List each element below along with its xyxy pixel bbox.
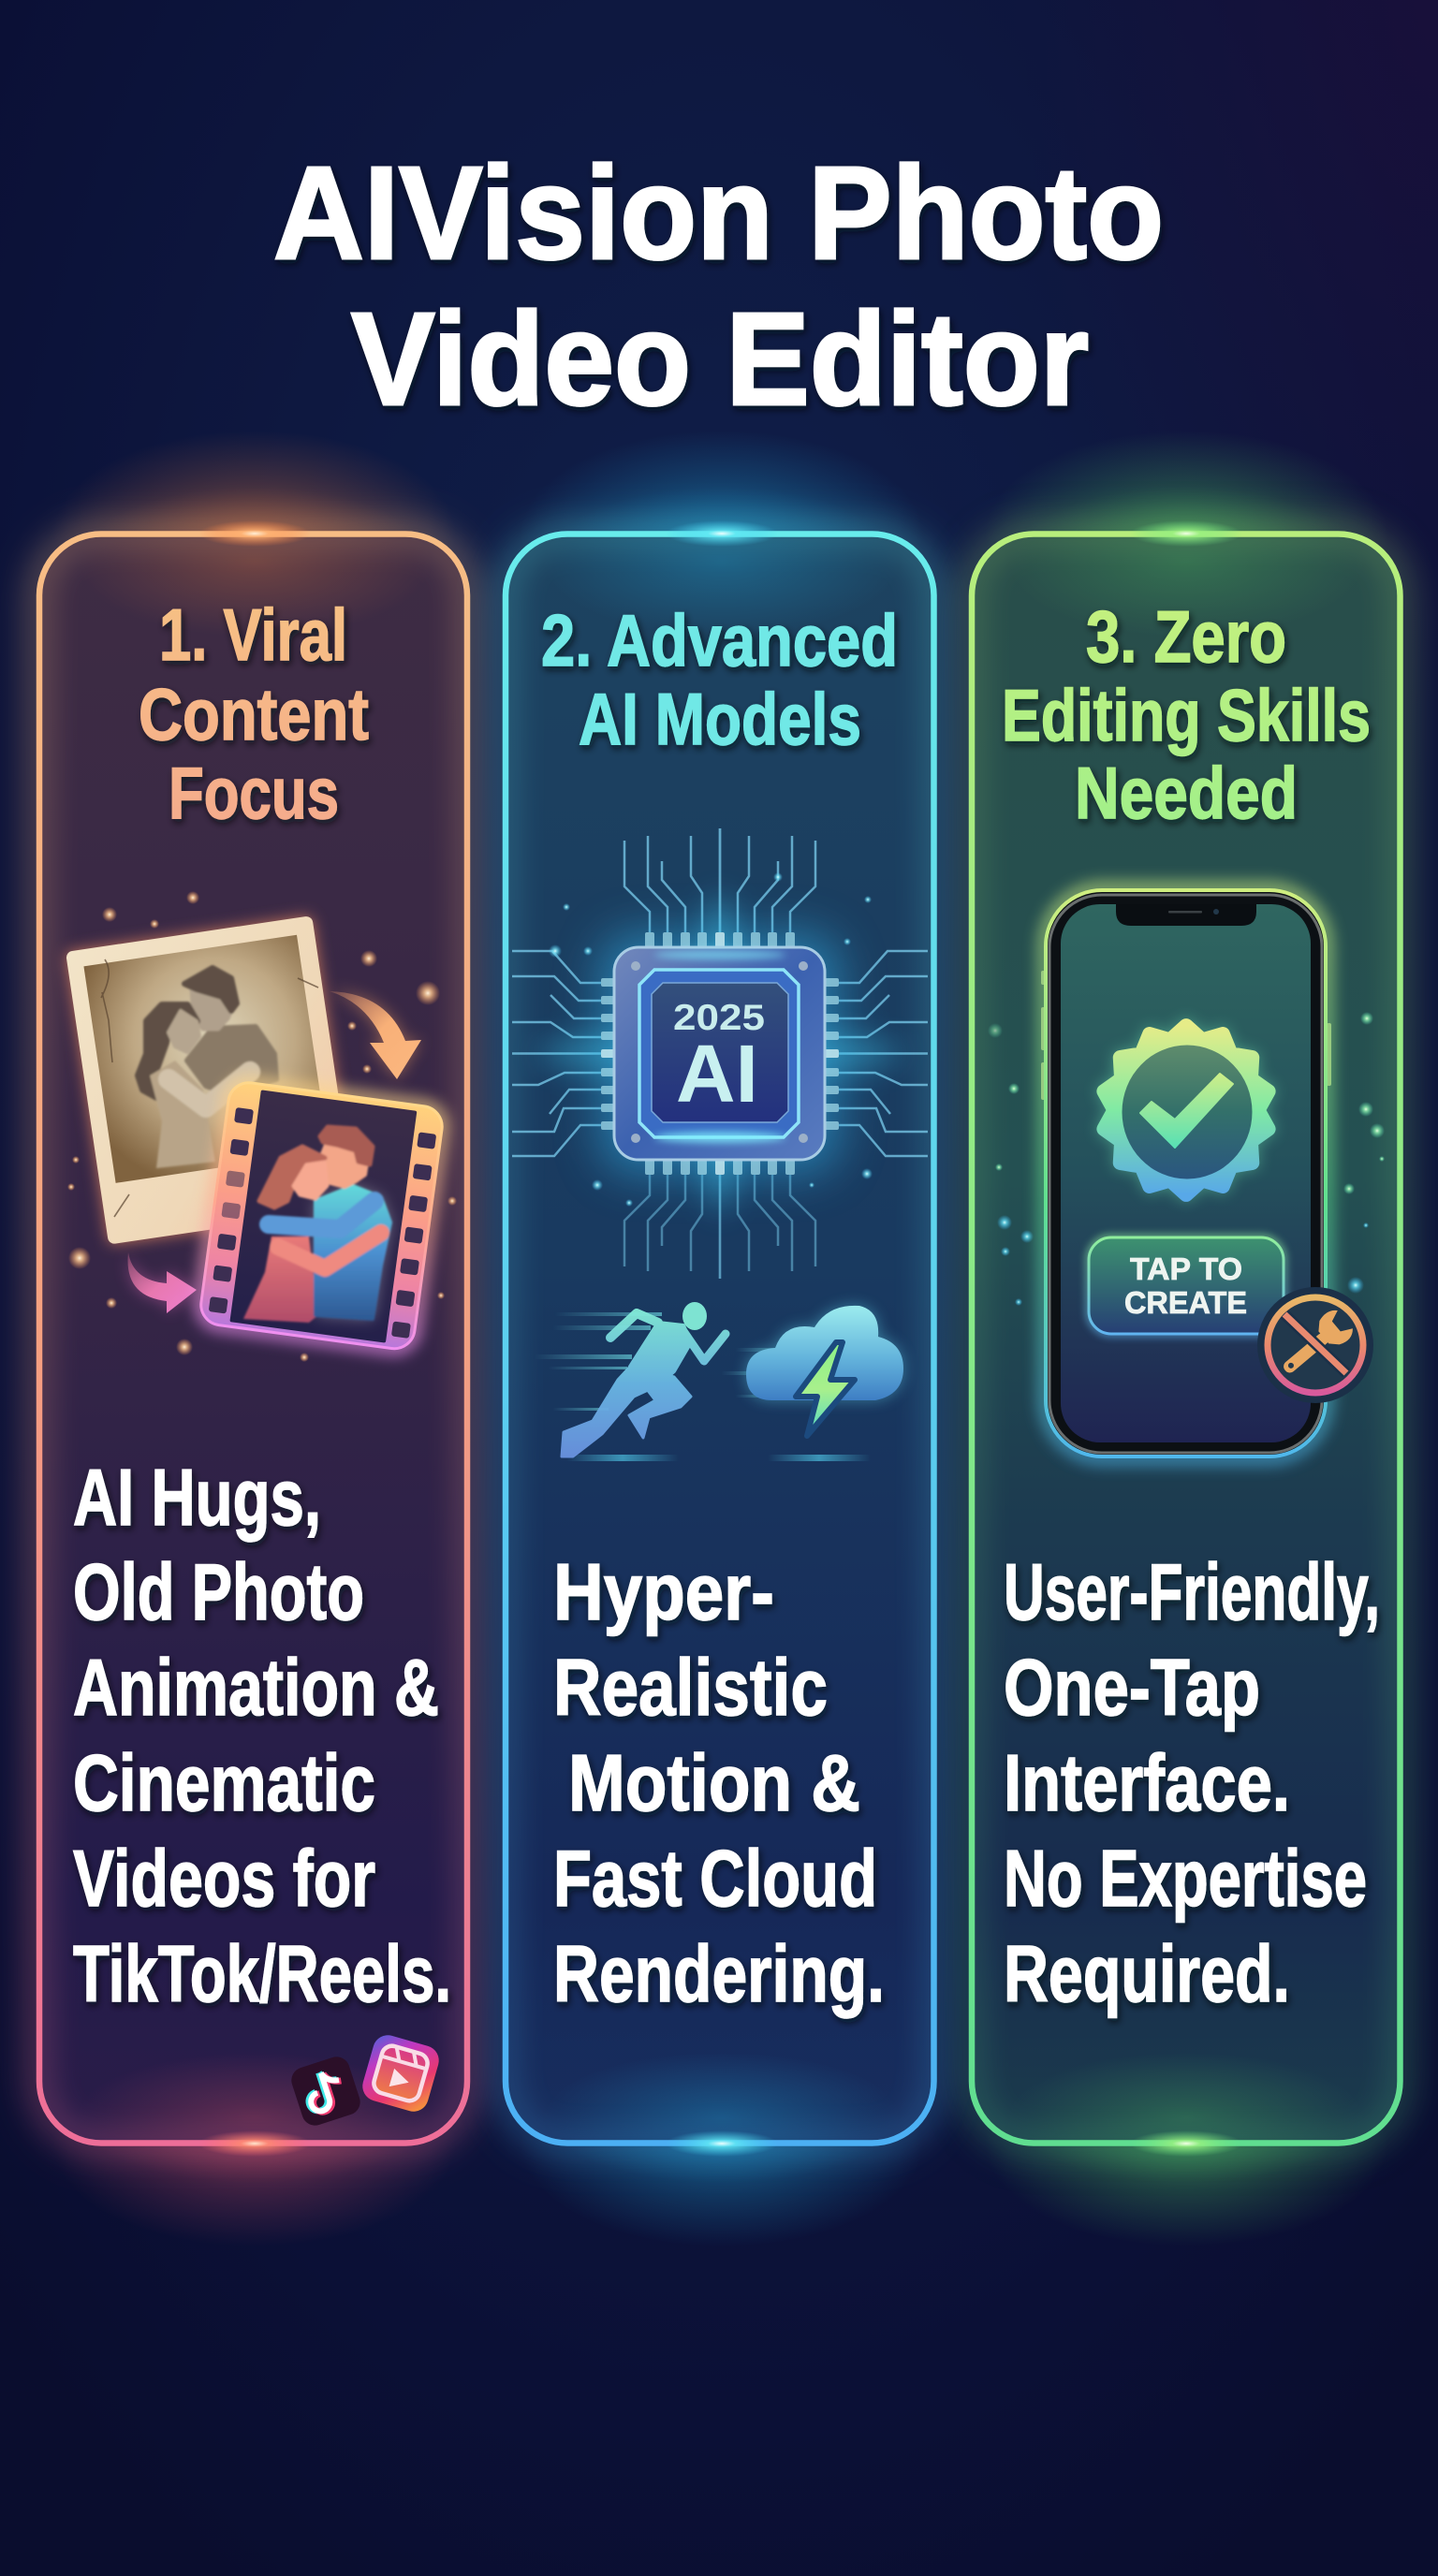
- body text: Motion &: [568, 1739, 860, 1828]
- button: tap to create: CREATE: [1124, 1285, 1247, 1320]
- icon: AI chip 2025: AI: [676, 1029, 758, 1120]
- icon: speed lines: [534, 1312, 871, 1461]
- icon: running figure: [562, 1302, 726, 1456]
- body text: Cinematic: [73, 1739, 375, 1828]
- body text: Animation &: [73, 1644, 439, 1733]
- heading: 2. Advanced AI Models: 2. Advanced: [541, 599, 898, 681]
- glowing film frame with embracing couple: [198, 1080, 445, 1351]
- old sepia photo: [66, 915, 355, 1245]
- body text: Hyper-: [553, 1548, 774, 1637]
- heading: 3. Zero Editing Skills Needed: Needed: [1075, 752, 1298, 834]
- body text: [553, 1548, 885, 2019]
- body text: AI Hugs,: [73, 1454, 321, 1543]
- button: tap to create: TAP TO: [1130, 1251, 1242, 1286]
- body text: TikTok/Reels.: [73, 1930, 451, 2019]
- body text: Realistic: [553, 1644, 828, 1733]
- arrow: old photo to film (orange): [330, 991, 421, 1079]
- arrow: pink curved: [128, 1252, 197, 1313]
- icon: cloud with lightning bolt: [746, 1306, 903, 1436]
- icon: smartphone: [1041, 888, 1373, 1458]
- body text: Old Photo: [73, 1548, 364, 1637]
- icon: AI chip circuit traces: [512, 828, 928, 1279]
- sparkles: [67, 891, 457, 1362]
- body text: Rendering.: [553, 1930, 885, 2019]
- heading: 1. Viral Content Focus: Content: [139, 673, 369, 755]
- sparkles: [988, 1012, 1385, 1306]
- panel: 1. Viral Content Focus: [39, 431, 467, 2247]
- title: AIVision Photo: [273, 139, 1164, 286]
- panel: 3. Zero Editing Skills Needed: [972, 431, 1401, 2247]
- body text: One-Tap: [1004, 1644, 1260, 1733]
- title: Video Editor: [351, 285, 1089, 432]
- heading: 3. Zero Editing Skills Needed: [1002, 595, 1371, 834]
- body text: [73, 1454, 451, 2019]
- body text: Interface.: [1004, 1739, 1290, 1828]
- heading: 2. Advanced AI Models: AI Models: [579, 678, 861, 760]
- sparkles: [549, 872, 873, 1207]
- heading: 1. Viral Content Focus: 1. Viral: [159, 593, 347, 676]
- heading: 1. Viral Content Focus: [139, 593, 369, 834]
- icon: Instagram Reels: [359, 2031, 443, 2115]
- title: [273, 139, 1164, 432]
- body text: Required.: [1004, 1930, 1290, 2019]
- heading: 1. Viral Content Focus: Focus: [169, 752, 339, 834]
- body text: Fast Cloud: [553, 1835, 877, 1924]
- body text: Videos for: [73, 1835, 375, 1924]
- panel: 2. Advanced AI Models: [506, 431, 934, 2247]
- heading: 2. Advanced AI Models: [541, 599, 898, 760]
- icon: TikTok: [288, 2054, 363, 2129]
- icon: AI chip 2025: 2025: [673, 998, 765, 1038]
- icon: verified badge with check: [1104, 1026, 1269, 1194]
- button: tap to create: [1089, 1237, 1284, 1334]
- icon: no tools badge: [1257, 1287, 1373, 1403]
- heading: 3. Zero Editing Skills Needed: 3. Zero: [1086, 595, 1286, 678]
- body text: [1004, 1548, 1380, 2019]
- icon: AI chip 2025: [537, 894, 902, 1212]
